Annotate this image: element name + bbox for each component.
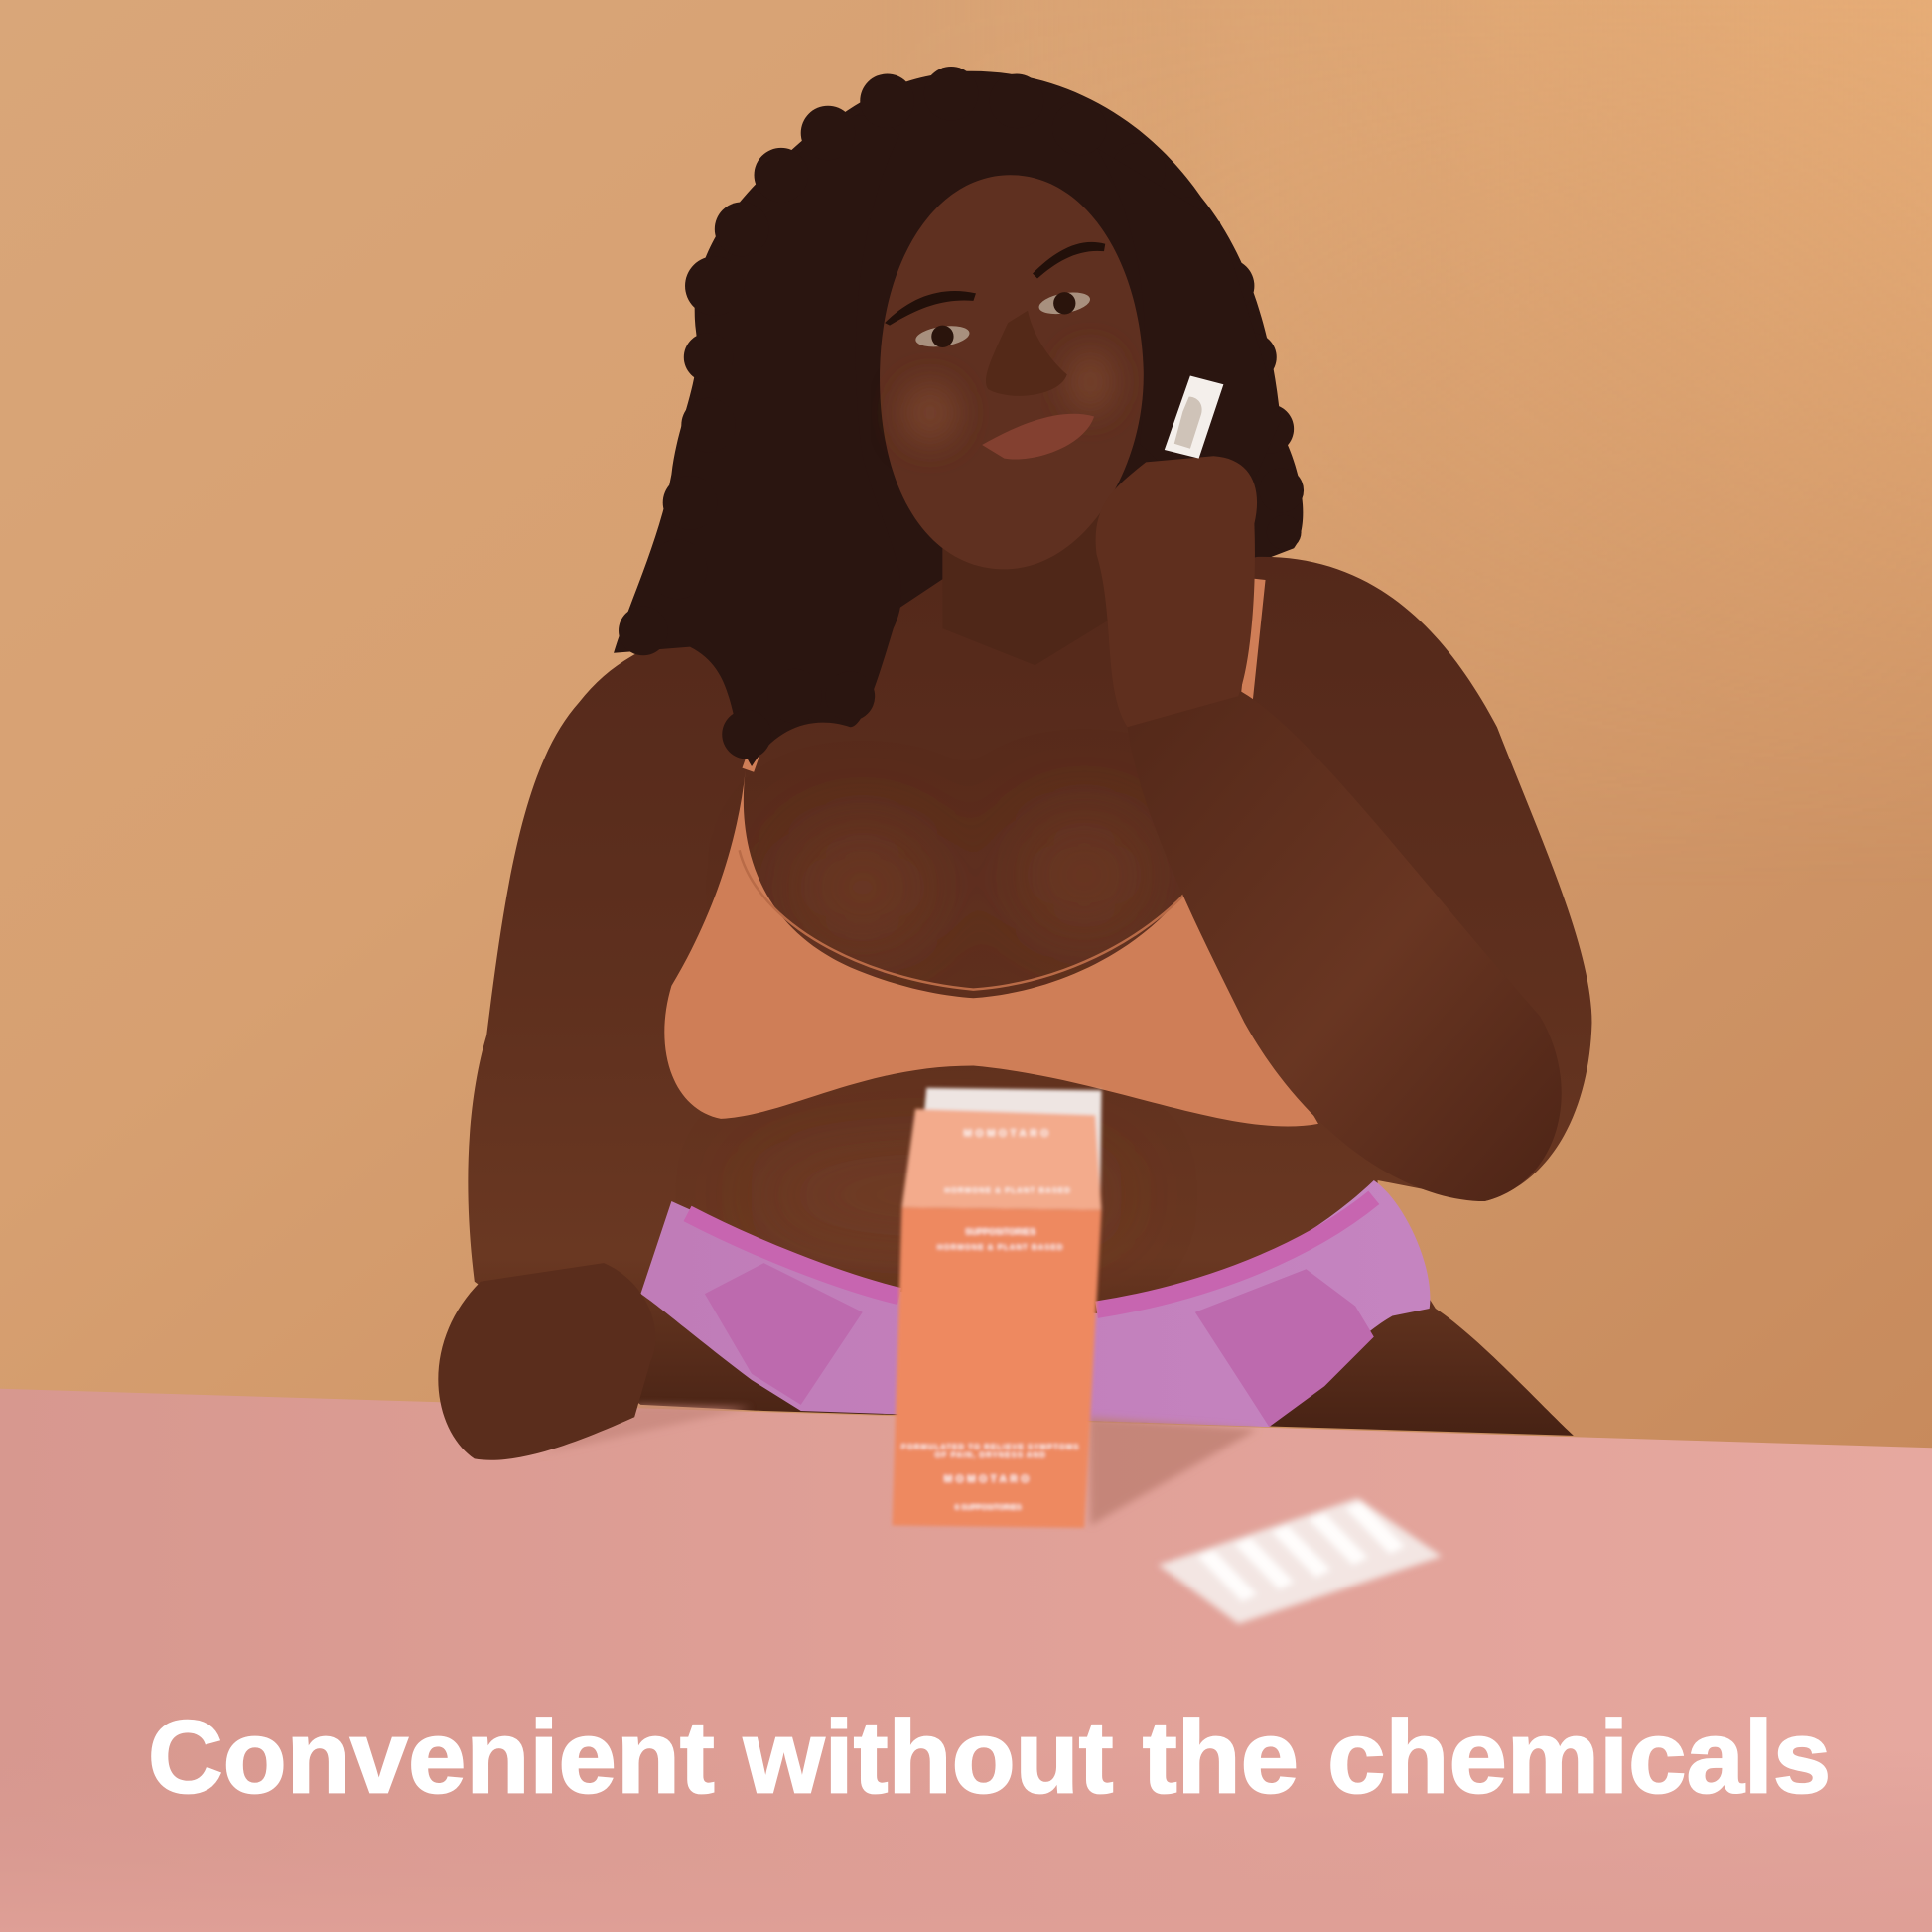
box front: OF PAIN, DRYNESS AND: [935, 1450, 1046, 1459]
bra: [664, 579, 1318, 1127]
box front: 6 SUPPOSITORIES: [955, 1502, 1022, 1511]
lace panel left: [705, 1263, 863, 1405]
eyes: [914, 323, 971, 349]
eyebrows: [885, 242, 1105, 326]
background wall: [0, 0, 1932, 1478]
hair left mass: [614, 67, 1304, 766]
box front: [893, 1207, 1102, 1528]
box front: SUPPOSITORIES: [965, 1227, 1035, 1237]
raised forearm: [1128, 690, 1562, 1201]
hair back: [763, 71, 1303, 640]
box front: FORMULATED TO RELIEVE SYMPTOMS: [901, 1443, 1080, 1451]
skin shading: [752, 813, 1152, 1238]
lips: [982, 414, 1094, 460]
headline caption: Convenient without the chemicals: [148, 1701, 1831, 1816]
shadows on table: [542, 1405, 1257, 1525]
box front: HORMONE & PLANT BASED: [937, 1242, 1063, 1251]
table surface: [0, 1389, 1932, 1932]
neck: [942, 492, 1115, 665]
box lid: HORMONE & PLANT BASED: [945, 1185, 1071, 1194]
figure: [468, 67, 1591, 1436]
face: [880, 175, 1144, 569]
box lid: [901, 1109, 1102, 1210]
product box: [893, 1088, 1102, 1528]
suppository held in hand: [1165, 376, 1223, 459]
nose: [986, 311, 1067, 396]
hand: [1096, 456, 1257, 727]
blister pack of suppositories: [1159, 1498, 1442, 1624]
torso: [468, 542, 1591, 1436]
hair right of face: [1097, 148, 1282, 530]
briefs: [640, 1180, 1430, 1427]
box lid: MOMOTARO: [964, 1128, 1052, 1139]
resting hand: [438, 1263, 655, 1460]
box front: MOMOTARO: [944, 1474, 1033, 1485]
lace panel right: [1195, 1269, 1374, 1427]
box inner white tray: [918, 1088, 1102, 1195]
